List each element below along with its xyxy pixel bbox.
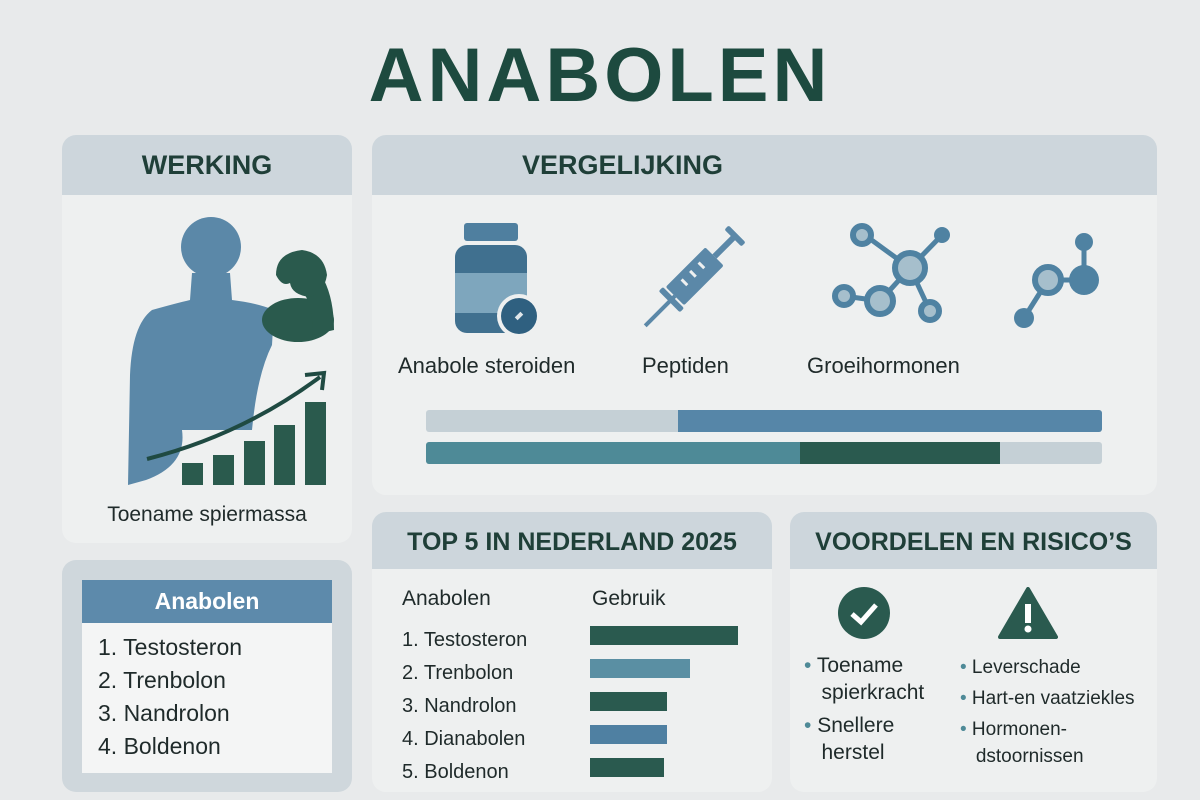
icon: molecule large — [832, 223, 950, 323]
risks list — [960, 657, 1135, 767]
list items: 3. Nandrolon — [98, 700, 230, 726]
ranking list: 2. Trenbolon — [402, 662, 513, 684]
column headers: Gebruik — [592, 587, 666, 610]
risks list: dstoornissen — [976, 746, 1084, 767]
label: anabole steroiden: Anabole steroiden — [398, 353, 575, 378]
ranking list — [402, 629, 527, 783]
title: ANABOLEN — [369, 33, 831, 118]
heading: vergelijking — [372, 135, 1157, 195]
ranking list: 5. Boldenon — [402, 761, 509, 783]
risks list: • Hormonen- — [960, 719, 1067, 740]
list items: 2. Trenbolon — [98, 667, 226, 693]
list items: 4. Boldenon — [98, 733, 221, 759]
benefits list: spierkracht — [822, 681, 924, 704]
heading: voordelen: VOORDELEN EN RISICO’S — [815, 528, 1132, 556]
panel: anabolen list — [62, 560, 352, 792]
label: groeihormonen: Groeihormonen — [807, 353, 960, 378]
heading: vergelijking: VERGELIJKING — [522, 150, 723, 180]
column headers: Anabolen — [402, 587, 491, 610]
icon: pill bottle — [455, 223, 537, 334]
risks list: • Leverschade — [960, 657, 1081, 678]
panel: vergelijking — [372, 135, 1157, 495]
benefits list: • Snellere — [804, 714, 894, 737]
panel: werking — [62, 135, 352, 543]
list box — [82, 580, 332, 773]
heading: top 5 — [372, 512, 772, 569]
icon: warning — [998, 587, 1058, 639]
panel: top 5 — [372, 512, 772, 792]
ranking list: 4. Dianabolen — [402, 728, 525, 750]
benefits list: herstel — [822, 741, 885, 764]
risks list: • Hart-en vaatziekles — [960, 688, 1135, 709]
heading: werking — [62, 135, 352, 195]
icon: syringe — [644, 226, 745, 328]
icon: body with muscle and growth chart — [128, 217, 334, 485]
icon: check — [838, 587, 890, 639]
list heading: Anabolen — [155, 588, 259, 614]
icon: molecule small — [1014, 233, 1099, 328]
caption: toename spiermassa: Toename spiermassa — [107, 503, 307, 526]
ranking list: 1. Testosteron — [402, 629, 527, 651]
ranking list: 3. Nandrolon — [402, 695, 517, 717]
label: peptiden: Peptiden — [642, 353, 729, 378]
heading: werking: WERKING — [142, 150, 272, 180]
heading: voordelen — [790, 512, 1157, 569]
column headers — [402, 587, 666, 610]
list heading — [82, 580, 332, 623]
benefits list — [804, 654, 924, 764]
benefits list: • Toename — [804, 654, 903, 677]
heading: top 5: TOP 5 IN NEDERLAND 2025 — [407, 528, 737, 556]
list items — [98, 634, 242, 759]
panel: voordelen en risico's — [790, 512, 1157, 792]
usage bar chart — [590, 626, 738, 777]
list items: 1. Testosteron — [98, 634, 242, 660]
comparison bars — [426, 410, 1102, 464]
